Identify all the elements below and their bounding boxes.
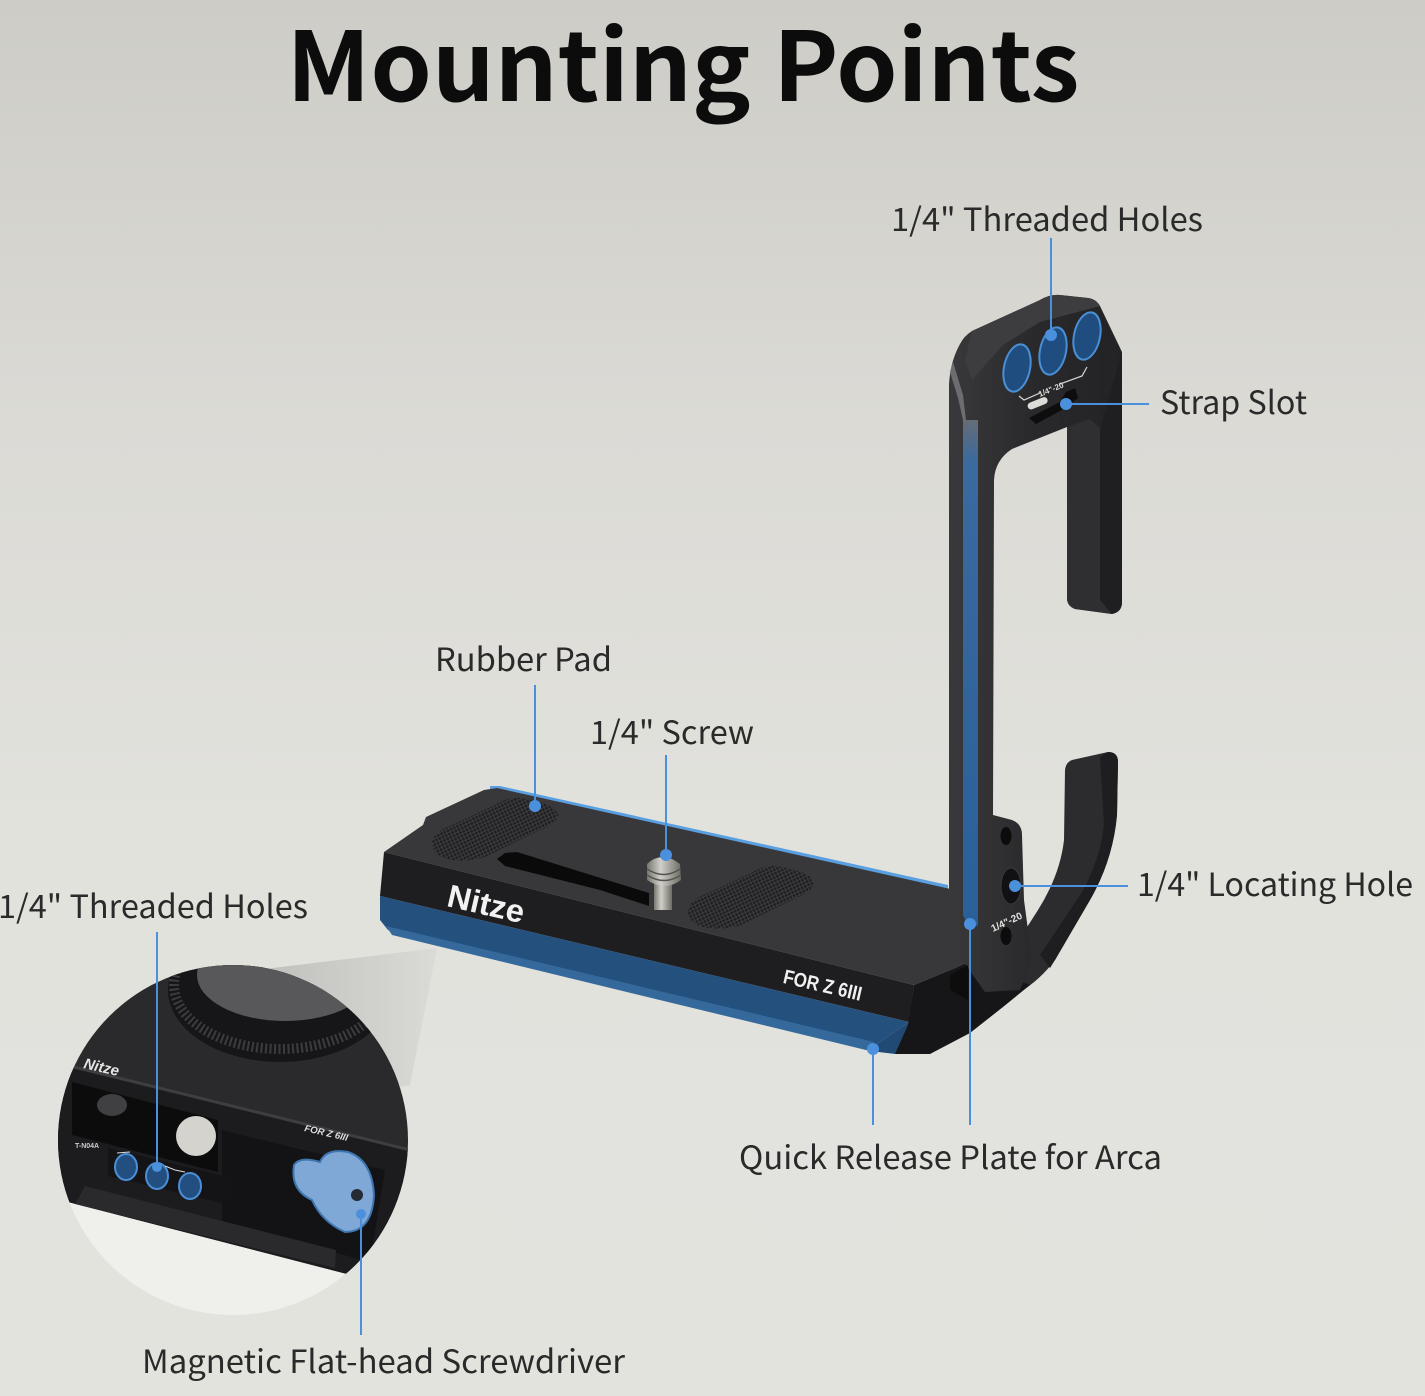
blue back edge <box>490 786 948 892</box>
callout: locating hole <box>1009 860 1413 906</box>
callout: left threaded holes: 1/4" Threaded Holes <box>0 882 308 928</box>
camera body <box>58 965 408 1274</box>
rubber pad: left <box>432 798 558 861</box>
right end of base <box>895 962 1030 1054</box>
thread in slot <box>97 1094 127 1116</box>
blue rail <box>380 896 909 1046</box>
upper threaded holes <box>999 310 1105 394</box>
callout: locating hole: 1/4" Locating Hole <box>1137 860 1413 906</box>
callout: rubber pad: Rubber Pad <box>435 635 612 681</box>
lower bracket holes: 1/4"-20 <box>990 911 1025 935</box>
inset detail: underside of the camera: T-N04A <box>75 1143 99 1150</box>
upright arm <box>949 295 1122 992</box>
callout: screwdriver: Magnetic Flat-head Screwdriver <box>142 1337 626 1383</box>
callout: top threaded holes: 1/4" Threaded Holes <box>891 195 1203 241</box>
slot <box>72 1082 218 1172</box>
callout: quick release plate: Quick Release Plate for Arca <box>739 1133 1162 1179</box>
mount dial <box>168 965 371 1062</box>
inset detail: underside of the camera: FOR Z 6III <box>303 1123 349 1144</box>
blue edge strip <box>963 420 978 930</box>
inset circle <box>58 965 408 1315</box>
L-bracket product photo <box>380 295 1122 1054</box>
engraved marking and strap slot <box>1019 367 1087 424</box>
front dark face <box>380 852 914 1022</box>
mounting slot <box>497 852 649 906</box>
hole carrier <box>110 1150 222 1203</box>
hook: lower retaining arm <box>1000 752 1118 992</box>
top surface <box>384 788 968 985</box>
model and brand text: Nitze <box>82 1055 121 1080</box>
callout: strap slot <box>1060 378 1307 424</box>
callout: top threaded holes <box>891 195 1203 341</box>
plate underside <box>58 1068 408 1274</box>
screw head <box>176 1116 216 1156</box>
callout: screwdriver <box>142 1209 626 1383</box>
callout: strap slot: Strap Slot <box>1160 378 1307 424</box>
callout: left threaded holes <box>0 882 308 1172</box>
callout: quick release plate <box>739 918 1162 1179</box>
base plate <box>380 786 1030 1054</box>
engraved marking and strap slot: 1/4"-20 <box>1037 380 1066 399</box>
magnifier beam <box>240 948 437 1100</box>
callout: screw <box>590 708 754 861</box>
brand text: Nitze <box>444 878 528 930</box>
1/4 inch screw <box>647 857 681 910</box>
model text: FOR Z 6III <box>781 966 864 1006</box>
rubber pad: right <box>688 866 814 929</box>
inset detail: underside of the camera <box>58 948 436 1315</box>
base notch below upright <box>950 965 968 1000</box>
callout: screw: 1/4" Screw <box>590 708 754 754</box>
inset threaded holes <box>115 1152 201 1199</box>
lower bracket holes <box>990 827 1025 945</box>
callout: rubber pad <box>435 635 612 812</box>
magnetic screwdriver <box>293 1151 374 1232</box>
